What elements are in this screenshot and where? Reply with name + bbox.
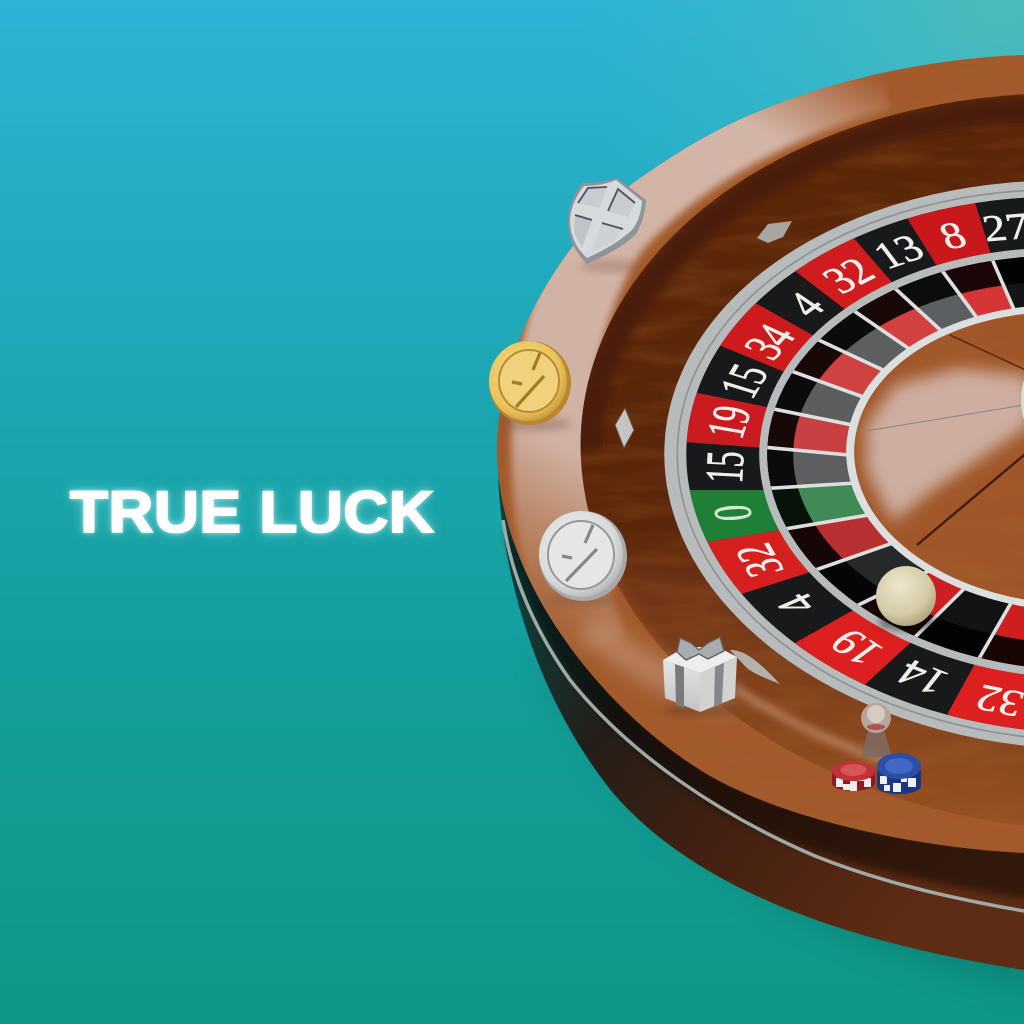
centre cone: wood hub with silver ring: [846, 306, 1024, 606]
icon: gold coin: [489, 341, 571, 431]
outer silver track: [650, 160, 1024, 770]
metal diamond: top: [757, 221, 792, 243]
wheel numbers: 19: [820, 621, 894, 673]
pocket dividers: [767, 260, 1016, 658]
wheel numbers: 4: [766, 586, 828, 622]
metal diamond: left: [615, 408, 634, 448]
wheel numbers: 14: [889, 651, 957, 703]
red chip stack: [832, 761, 875, 791]
inner silver ring: [748, 232, 1024, 694]
wheel numbers: [694, 206, 1024, 724]
metal spike pointer: [730, 650, 780, 684]
roulette wheel: [490, 50, 1024, 970]
icon: silver shield: [568, 178, 646, 273]
wheel numbers: 32: [724, 538, 796, 582]
ball pockets: [767, 257, 1024, 666]
silver trim line: [503, 520, 1024, 911]
rim highlight: lower sheen: [590, 625, 905, 768]
wheel numbers: 15: [708, 358, 780, 404]
wheel numbers: 19: [695, 402, 763, 442]
blue chip stack: [877, 753, 921, 794]
wheel numbers: 15: [694, 450, 756, 484]
wheel numbers: 13: [865, 227, 933, 277]
icon: gift box: [663, 637, 740, 716]
ivory ball: [876, 566, 938, 630]
glass pawn: [861, 703, 892, 757]
icon: glass pawn and casino chips: [832, 703, 921, 794]
title: TRUE LUCK: [70, 480, 434, 545]
wheel numbers: 34: [733, 317, 807, 367]
wheel numbers: 32: [813, 250, 885, 302]
wheel numbers: 0: [702, 503, 764, 523]
icon: silver coin: [539, 511, 627, 606]
wheel numbers: 4: [776, 285, 836, 325]
centre spindle: [1021, 374, 1024, 426]
wheel body: lower cylinder: [498, 470, 1024, 970]
wheel rim: upper wood ring: [490, 50, 1024, 860]
wheel bowl: inner wood surface: [580, 94, 1024, 826]
number ring: [686, 198, 1024, 730]
wheel numbers: 8: [933, 214, 973, 258]
